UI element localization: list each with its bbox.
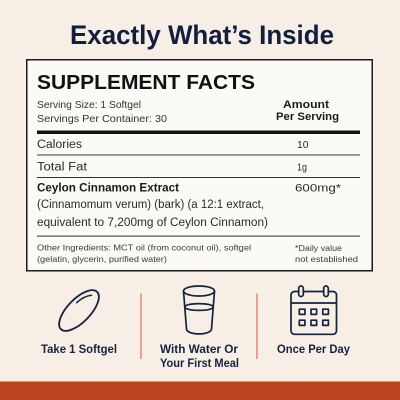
- divider: [140, 294, 142, 359]
- text: serving info: [37, 99, 167, 125]
- text: amount per serving: Amount: [283, 99, 329, 111]
- label: take 1 softgel: Take 1 Softgel: [41, 342, 117, 356]
- title: Exactly What’s Inside: [70, 20, 334, 50]
- icon: softgel: [53, 284, 105, 337]
- row: total fat: [37, 162, 307, 174]
- footer band: [0, 382, 400, 400]
- text: other ingredients: (gelatin, glycerin, purified water): [37, 254, 167, 264]
- label: once per day: Once Per Day: [277, 342, 350, 356]
- text: serving info: Serving Size: 1 Softgel: [37, 99, 141, 111]
- icon: glass of water: [184, 286, 214, 334]
- row: ceylon cinnamon extract: Ceylon Cinnamon Extract: [37, 182, 179, 194]
- row: calories: Calories: [37, 139, 82, 151]
- text: amount per serving: Per Serving: [276, 111, 339, 123]
- heading: supplement facts: SUPPLEMENT FACTS: [37, 71, 255, 94]
- row: calories: 10: [297, 139, 309, 151]
- label: with water or your first meal: Your First Meal: [160, 356, 239, 370]
- label: with water or your first meal: [160, 342, 239, 370]
- text: serving info: Servings Per Container: 30: [37, 113, 167, 125]
- text: amount per serving: [276, 99, 339, 123]
- icon: calendar: [291, 286, 336, 334]
- row: ceylon cinnamon extract: (Cinnamomum verum) (bark) (a 12:1 extract,: [37, 199, 264, 211]
- row: calories: [37, 139, 309, 151]
- divider: [256, 294, 258, 359]
- text: other ingredients: Other Ingredients: MCT oil (from coconut oil), softgel: [37, 242, 251, 252]
- row: ceylon cinnamon extract: equivalent to 7,200mg of Ceylon Cinnamon): [37, 217, 268, 229]
- text: other ingredients: [37, 242, 251, 264]
- row: total fat: 1g: [297, 162, 307, 174]
- row: total fat: Total Fat: [37, 162, 88, 174]
- row: ceylon cinnamon extract: [37, 182, 342, 229]
- text: daily value note: *Daily value: [295, 243, 342, 253]
- panel: supplement facts: [27, 60, 372, 271]
- text: daily value note: not established: [295, 254, 358, 264]
- row: ceylon cinnamon extract: 600mg*: [295, 182, 342, 194]
- text: daily value note: [295, 243, 358, 264]
- label: with water or your first meal: With Water Or: [160, 342, 238, 356]
